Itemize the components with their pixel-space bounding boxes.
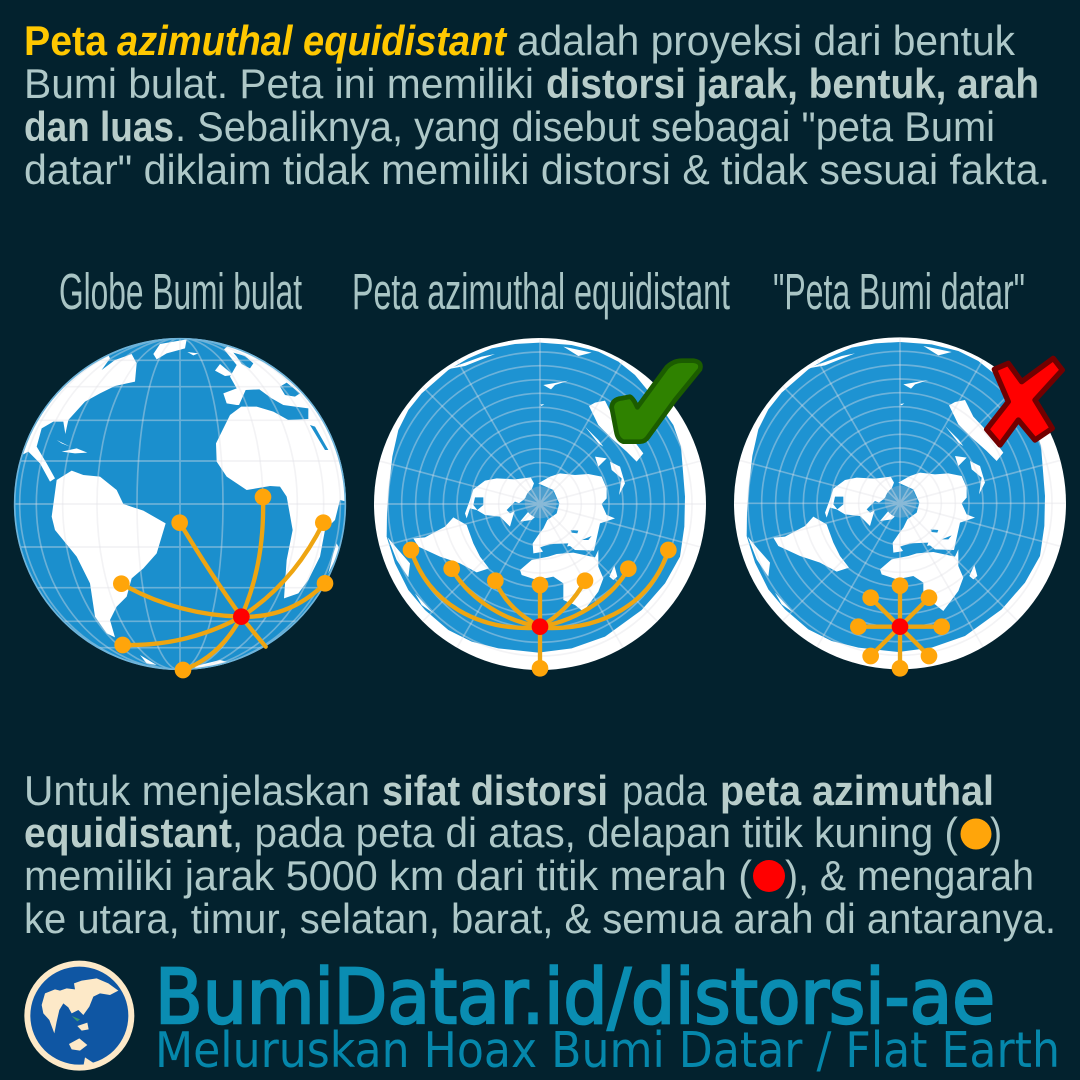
yellow points on azimuthal map [403, 542, 677, 677]
red point on azimuthal map [532, 618, 548, 635]
distance lines on flat earth map [858, 586, 942, 668]
intro line 2: Bumi bulat. Peta ini memiliki [24, 60, 534, 107]
explanation line 3: ), & mengarah [785, 852, 1034, 899]
intro text block [24, 17, 1050, 193]
logo: globe badge [24, 961, 134, 1071]
intro line 4: datar" diklaim tidak memiliki distorsi & tidak sesuai fakta. [24, 146, 1050, 193]
explanation line 4: ke utara, timur, selatan, barat, & semua arah di antaranya. [24, 895, 1056, 942]
continents on globe [21, 340, 346, 669]
explanation text block [24, 767, 1056, 942]
explanation line 1: peta azimuthal [720, 767, 994, 814]
intro line 1: azimuthal equidistant [117, 17, 508, 64]
globe with distance lines [14, 338, 346, 678]
intro line 1: adalah proyeksi dari bentuk [517, 17, 1016, 64]
explanation line 1: Untuk menjelaskan [24, 767, 370, 814]
heading: azimuthal map: Peta azimuthal equidistant [352, 263, 730, 320]
intro line 3: . Sebaliknya, yang disebut sebagai "peta Bumi [175, 103, 995, 150]
explanation line 2: ) [990, 809, 1002, 856]
red point on globe [233, 608, 250, 625]
distance lines on globe [121, 497, 325, 670]
website footer [155, 952, 1060, 1079]
azimuthal equidistant map [374, 338, 706, 677]
explanation line 2: equidistant [24, 809, 232, 856]
explanation line 1: sifat distorsi [382, 767, 608, 814]
intro line 2 [24, 60, 1039, 107]
explanation line 1 [24, 767, 994, 814]
icon: red cross [987, 358, 1062, 445]
distance lines on azimuthal map [411, 550, 668, 668]
flat earth map [734, 337, 1066, 677]
heading: globe: Globe Bumi bulat [59, 263, 302, 320]
explanation line 3: memiliki jarak 5000 km dari titik merah ( [24, 852, 752, 899]
column headings [59, 263, 1025, 320]
website url: BumiDatar.id/distorsi-ae [155, 952, 995, 1041]
globe graticule [13, 338, 347, 670]
explanation line 2: , pada peta di atas, delapan titik kuning ( [232, 809, 958, 856]
yellow points on flat earth map [850, 577, 950, 677]
yellow points on globe [113, 489, 333, 678]
intro line 1 [24, 17, 1016, 64]
explanation line 1: pada [622, 767, 708, 814]
red point on flat earth map [892, 618, 908, 635]
icon: green check mark [612, 361, 700, 442]
intro line 3: dan luas [24, 103, 174, 150]
intro line 1: Peta [24, 17, 108, 64]
intro line 2: distorsi jarak, bentuk, arah [546, 60, 1039, 107]
